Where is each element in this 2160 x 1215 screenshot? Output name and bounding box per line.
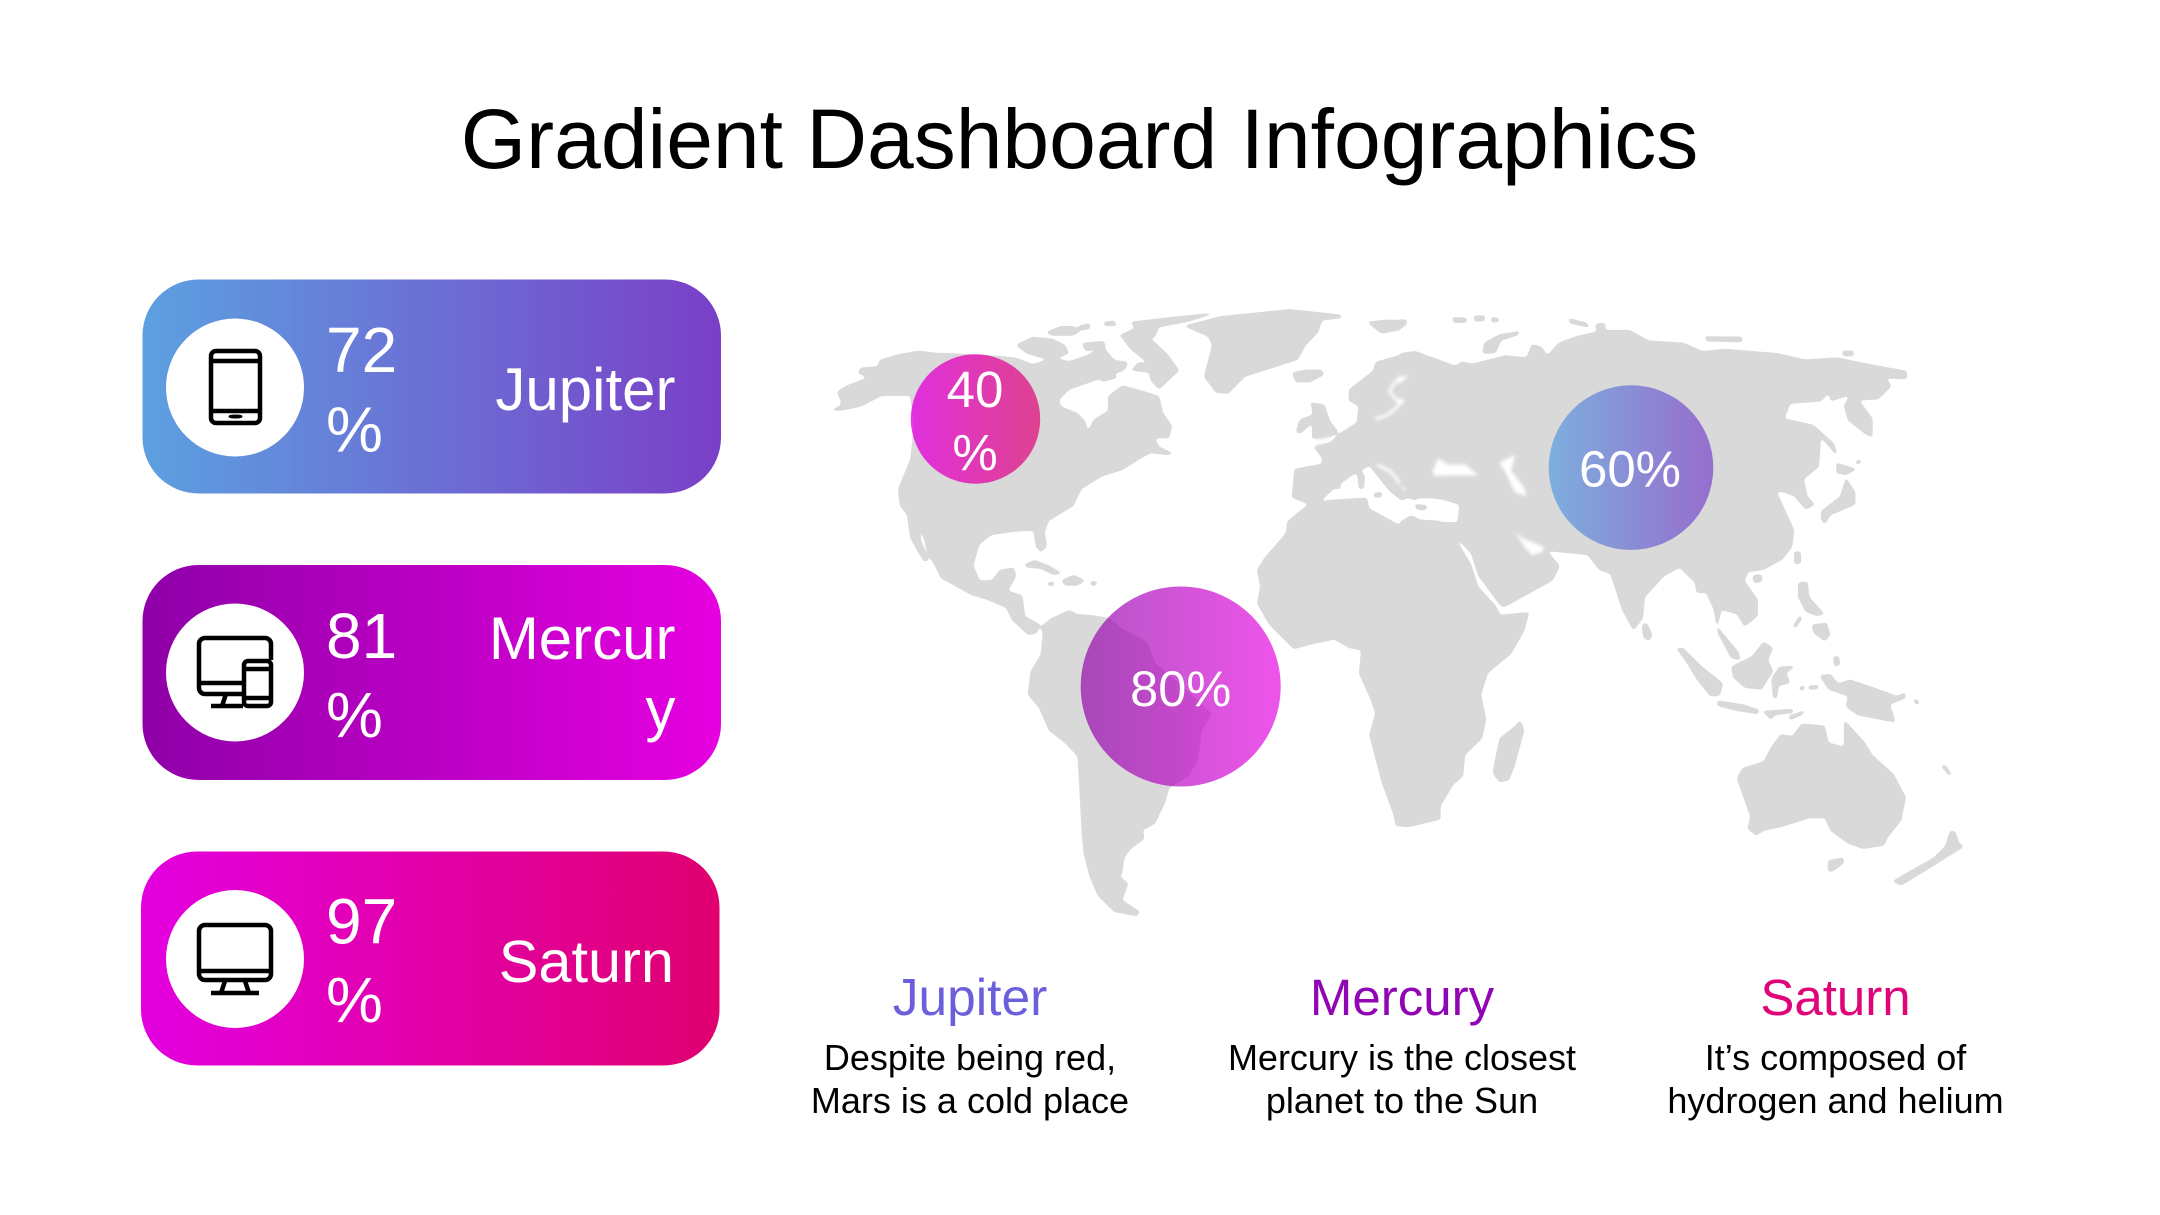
text block: Jupiter: Mars is a cold place <box>811 1080 1129 1121</box>
Caribbean islands <box>1024 560 1098 587</box>
text block: Mercury <box>1228 969 1576 1121</box>
stat value: 72%: % <box>326 394 383 466</box>
stat value: 97%: % <box>326 964 383 1036</box>
Africa east <box>1400 515 1529 825</box>
Greenland <box>1184 309 1343 394</box>
card label: Mercury: y <box>646 676 676 743</box>
card label: Mercury: Mercur <box>489 605 676 672</box>
text block: Mercury: planet to the Sun <box>1266 1080 1538 1121</box>
Australia <box>1737 719 1906 849</box>
map bubble: 40%: 40 <box>947 361 1003 418</box>
Europe <box>1292 351 1441 504</box>
title: Gradient Dashboard Infographics <box>461 92 1698 186</box>
card label: Jupiter: Jupiter <box>495 356 676 423</box>
Eurasia <box>1400 330 1907 660</box>
Black Sea, Caspian Sea, Persian Gulf and Baltic <box>1398 376 1544 555</box>
Southeast Asia islands <box>1642 551 1920 720</box>
icon: desktop monitor <box>199 925 271 993</box>
text block: Saturn: It’s composed of <box>1705 1037 1967 1078</box>
panel: Mercury stat card <box>142 565 721 780</box>
map bubble: 60% <box>1549 385 1713 550</box>
map bubble: 60%: 60% <box>1579 441 1681 498</box>
map bubble: 80% <box>1081 586 1281 786</box>
text block: Jupiter: Jupiter <box>893 968 1047 1026</box>
stat value: 72%: 72 <box>326 314 397 386</box>
icon: tablet <box>211 351 260 423</box>
text block: Mercury: Mercury <box>1310 969 1495 1026</box>
text block: Saturn: hydrogen and helium <box>1667 1080 2004 1121</box>
North America <box>829 347 1173 635</box>
map bubble: 40%: % <box>952 424 998 481</box>
panel: Saturn stat card <box>141 852 720 1066</box>
stat value: 81%: 81 <box>326 600 397 672</box>
Africa west <box>1257 498 1441 827</box>
icon: desktop and tablet <box>199 638 271 706</box>
Iceland, Britain, Ireland and Svalbard <box>1292 320 1408 439</box>
card label: Saturn: Saturn <box>499 928 674 995</box>
world map <box>829 309 1964 916</box>
map: Americas and western Europe and Africa <box>829 309 1441 916</box>
Tasmania, New Zealand and New Caledonia <box>1828 765 1964 886</box>
text block: Mercury: Mercury is the closest <box>1228 1037 1576 1078</box>
Baltic and Adriatic seas <box>1313 377 1408 490</box>
stat value: 81%: % <box>326 679 383 751</box>
Arctic Russia islands <box>1398 315 1854 356</box>
text block: Saturn <box>1667 969 2004 1121</box>
stat value: 97%: 97 <box>326 886 397 958</box>
panel: Jupiter stat card <box>142 280 721 494</box>
map bubble: 80%: 80% <box>1130 660 1231 717</box>
text block: Saturn: Saturn <box>1760 969 1911 1026</box>
map: Asia, Africa east and Oceania <box>1398 315 1964 886</box>
text block: Jupiter <box>811 968 1129 1121</box>
New Guinea <box>1819 674 1906 723</box>
text block: Jupiter: Despite being red, <box>824 1037 1116 1078</box>
Arctic Canada islands <box>1015 312 1220 390</box>
Mediterranean islands <box>1334 470 1428 510</box>
South America <box>1028 610 1212 916</box>
Japan <box>1821 459 1861 525</box>
map bubble: 40% <box>911 354 1040 484</box>
Madagascar <box>1493 720 1524 782</box>
